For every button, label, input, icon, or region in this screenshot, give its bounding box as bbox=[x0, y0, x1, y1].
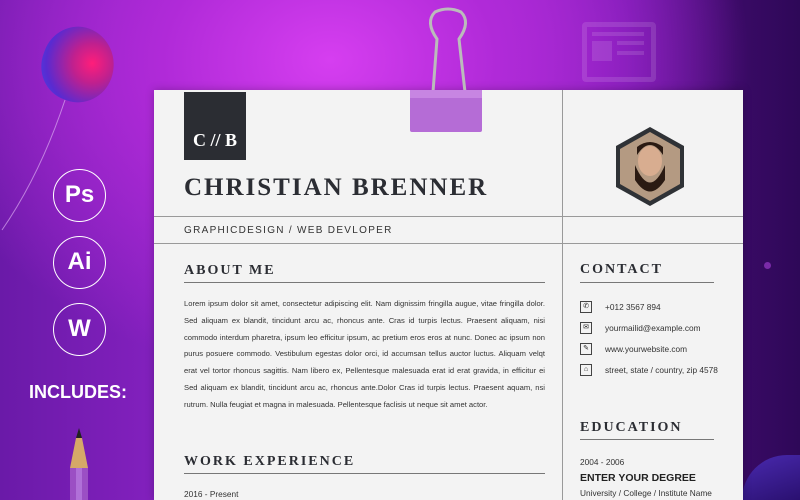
photo hexagon bbox=[616, 127, 684, 206]
balloon string bbox=[2, 100, 66, 230]
contact list: +012 3567 894 bbox=[605, 302, 661, 312]
binder clip bbox=[410, 8, 482, 132]
logo monogram bbox=[184, 92, 246, 160]
contact list: yourmailid@example.com bbox=[605, 323, 701, 333]
icon: W bbox=[53, 303, 106, 356]
text block: about me: Lorem ipsum dolor sit amet, consectetur adipiscing elit. Nam dignissim fringilla augue, vitae fringilla dolor. bbox=[184, 299, 545, 308]
icon: web bbox=[580, 343, 592, 355]
icon: Ps bbox=[53, 169, 106, 222]
text block: about me: commodo interdum pharetra, ipsum leo efficitur ipsum, ac pretium eros eros at nunc. Donec ac ipsum non bbox=[184, 333, 545, 342]
text: work date: 2016 - Present bbox=[184, 489, 238, 499]
decorative balloon bbox=[31, 17, 125, 112]
icon: newspaper watermark bbox=[582, 22, 656, 82]
title: name: CHRISTIAN BRENNER bbox=[184, 174, 488, 201]
icon: phone bbox=[580, 301, 592, 313]
decorative dot bbox=[764, 262, 771, 269]
decorative blob bottom right bbox=[742, 455, 800, 500]
icon: W: W bbox=[68, 315, 91, 342]
education entry: ENTER YOUR DEGREE bbox=[580, 472, 696, 484]
icon: web: ✎ bbox=[583, 345, 589, 352]
icon: phone: ✆ bbox=[583, 303, 589, 310]
text block: about me: Sed aliquam ex blandit, tincidunt arcu ac, rhoncus ante. Cras id turpis lectus. Praesent aliquam, nisi bbox=[184, 316, 545, 325]
text block: about me bbox=[184, 299, 545, 409]
contact list bbox=[580, 301, 718, 376]
includes label: INCLUDES: bbox=[29, 382, 127, 402]
subtitle: GRAPHICDESIGN / WEB DEVLOPER bbox=[184, 225, 393, 236]
education entry bbox=[580, 457, 712, 498]
icon: mail: ✉ bbox=[583, 324, 589, 331]
education entry: University / College / Institute Name bbox=[580, 488, 712, 498]
logo monogram: C // B bbox=[193, 130, 237, 150]
heading: education: EDUCATION bbox=[580, 420, 683, 435]
heading: contact: CONTACT bbox=[580, 262, 663, 277]
education entry: 2004 - 2006 bbox=[580, 457, 624, 467]
text block: about me: Sed aliquam ex blandit, tincidunt arcu ac, rhoncus ante.Dolor Cras id turpis lectus. Praesent aquam, nsi bbox=[184, 383, 545, 392]
text block: about me: erat vel tortor rhoncus sagittis. Nam libero ex, Pellentesque malesuada erat id erat gravida, in efficitur ei bbox=[184, 366, 545, 375]
panel: resume paper bbox=[154, 90, 743, 500]
icon: home bbox=[580, 364, 592, 376]
contact list: www.yourwebsite.com bbox=[605, 344, 687, 354]
text block: about me: rutrum. Nulla feugiat et magna in malesuada. Pellentesque faclisis ut neque sit amet actor. bbox=[184, 400, 488, 409]
heading: work experience: WORK EXPERIENCE bbox=[184, 454, 355, 469]
text block: about me: purus posuere commodo. Vestibulum egestas dolor orci, id accumsan tellus auctor luctus. Aliquam velqt bbox=[184, 349, 545, 358]
icon: home: ⌂ bbox=[584, 366, 588, 373]
icon: Ps: Ps bbox=[65, 181, 94, 208]
heading: about me: ABOUT ME bbox=[184, 263, 276, 278]
icon: Ai bbox=[53, 236, 106, 289]
icon: Ai: Ai bbox=[68, 248, 92, 275]
pencil bbox=[70, 428, 88, 500]
contact list: street, state / country, zip 4578 bbox=[605, 365, 718, 375]
icon: mail bbox=[580, 322, 592, 334]
